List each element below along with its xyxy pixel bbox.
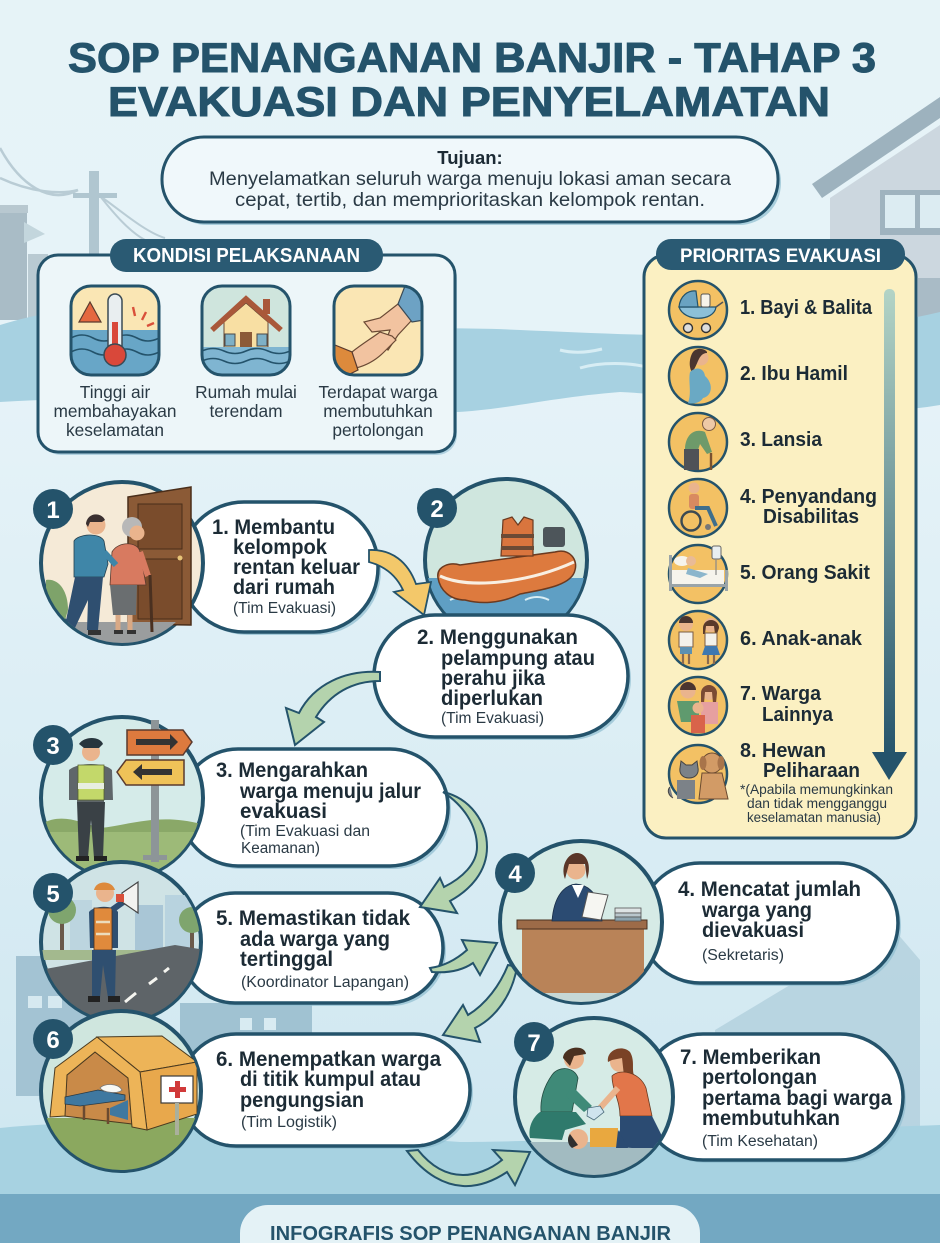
text: warga lainnya: 7. Warga [740, 683, 822, 705]
text: step 2: pelampung atau [441, 646, 595, 670]
text: kondisi 2 [195, 382, 297, 421]
badge: 3 [33, 725, 73, 765]
text: step 3: evakuasi [240, 799, 327, 823]
illustration: step 3 officer and signs [40, 717, 205, 882]
text: hewan peliharaan: Peliharaan [763, 760, 860, 782]
text: step 1: kelompok [233, 535, 327, 559]
title: EVAKUASI DAN PENYELAMATAN [108, 78, 830, 125]
arrow: step 3 to 5 [420, 792, 487, 913]
text: kondisi 1: membahayakan [54, 401, 176, 421]
text: step 5: ada warga yang [240, 927, 390, 951]
callout: tujuan: Menyelamatkan seluruh warga menuju lokasi aman secara [209, 168, 731, 190]
text: step 6: (Tim Logistik) [241, 1114, 337, 1131]
text: warga lainnya [740, 683, 834, 726]
text: warga lainnya: Lainnya [762, 704, 834, 726]
icon: hewan peliharaan [668, 745, 728, 803]
heading: kondisi pelaksanaan: KONDISI PELAKSANAAN [133, 245, 360, 267]
icon: bayi [669, 281, 727, 339]
text: step 2: (Tim Evakuasi) [441, 710, 544, 727]
text: step 7 [680, 1045, 893, 1150]
text: step 7: (Tim Kesehatan) [702, 1133, 818, 1150]
text: orang sakit: 5. Orang Sakit [740, 562, 870, 584]
badge: 7 [514, 1022, 554, 1062]
text: step 6: di titik kumpul atau [240, 1067, 421, 1091]
illustration: step 5 field coordinator [40, 862, 205, 1025]
arrow: step 1 to 2 [369, 550, 431, 615]
text: kondisi 3: Terdapat warga [318, 382, 438, 402]
text: disabilitas: Disabilitas [763, 506, 859, 528]
text: step 1 [212, 515, 361, 617]
step 3 card [180, 749, 451, 869]
text: disabilitas: 4. Penyandang [740, 486, 877, 508]
panel: prioritas evakuasi [644, 239, 916, 838]
footer label [240, 1205, 700, 1243]
text: step 3: 3. Mengarahkan [216, 758, 368, 782]
text: step 1: dari rumah [233, 575, 335, 599]
text: kondisi 2: terendam [209, 401, 283, 421]
badge: 6 [33, 1019, 73, 1059]
arrow: step 5 to 4 [430, 940, 497, 975]
text: kondisi 1: keselamatan [66, 420, 164, 440]
text: step 6: 6. Menempatkan warga [216, 1047, 442, 1071]
pill: step 2 [374, 615, 631, 740]
icon: thermometer in water [71, 286, 159, 375]
heading: prioritas evakuasi [656, 239, 905, 270]
badge: 4: 4 [508, 861, 522, 888]
text: step 4: warga yang [701, 898, 812, 922]
text: step 6 [216, 1047, 442, 1131]
icon: disabilitas [669, 479, 727, 537]
icon: flooded house [202, 286, 290, 375]
arrow: step 4 to 6 [443, 965, 517, 1042]
badge: 2 [417, 488, 457, 528]
text: step 2: diperlukan [441, 686, 543, 710]
text: step 4: 4. Mencatat jumlah [678, 877, 861, 901]
pill: step 4 [640, 863, 901, 986]
text: bayi: 1. Bayi & Balita [740, 297, 873, 319]
pill: step 3 [180, 749, 451, 869]
text: step 5: 5. Memastikan tidak [216, 906, 410, 930]
badge: 1: 1 [46, 497, 60, 524]
text: step 7: membutuhkan [702, 1106, 840, 1130]
text: anak-anak: 6. Anak-anak [740, 628, 863, 650]
icon: anak-anak [669, 611, 727, 669]
text: lansia: 3. Lansia [740, 429, 823, 451]
note: hewan [740, 782, 893, 825]
icon: helping hands [334, 286, 424, 376]
text: step 4 [678, 877, 861, 964]
text: step 6: pengungsian [240, 1088, 364, 1112]
icon: lansia [669, 413, 727, 471]
arrow: priority order [872, 289, 907, 780]
step 1 card [180, 502, 381, 635]
badge: 1 [33, 489, 73, 529]
text: kondisi 3: membutuhkan [323, 401, 433, 421]
step 6 card [180, 1034, 473, 1149]
illustration: step 4 secretary [500, 841, 665, 1010]
callout: tujuan: Tujuan: [437, 147, 503, 168]
illustration: step 7 first aid [510, 1018, 680, 1182]
text: kondisi 3: pertolongan [332, 420, 424, 440]
text: step 5 [216, 906, 410, 991]
icon: warga lainnya [669, 677, 727, 735]
text: step 2: 2. Menggunakan [417, 625, 578, 649]
step 5 card [180, 893, 446, 1006]
text: step 7: 7. Memberikan [680, 1045, 821, 1069]
step 4 card [640, 863, 901, 986]
text: hewan peliharaan [740, 740, 860, 782]
pill: step 6 [180, 1034, 473, 1149]
text: kondisi 1 [54, 382, 176, 440]
text: kondisi 1: Tinggi air [80, 382, 150, 402]
pill: step 5 [180, 893, 446, 1006]
note: hewan: keselamatan manusia) [747, 810, 881, 825]
text: step 1: 1. Membantu [212, 515, 335, 539]
icon: orang sakit [669, 545, 728, 603]
text: kondisi 3 [318, 382, 438, 440]
title [68, 34, 876, 125]
text: kondisi 2: Rumah mulai [195, 382, 297, 402]
text: ibu hamil: 2. Ibu Hamil [740, 363, 848, 385]
title: SOP PENANGANAN BANJIR - TAHAP 3 [68, 34, 876, 81]
text: step 7: pertolongan [702, 1065, 817, 1089]
badge: 3: 3 [46, 733, 60, 760]
text: step 3: warga menuju jalur [239, 779, 422, 803]
callout: tujuan: cepat, tertib, dan memprioritaskan kelompok rentan. [235, 189, 705, 211]
illustration: step 1 helping elder [40, 482, 205, 652]
text: step 4: (Sekretaris) [702, 947, 784, 964]
text: step 3: (Tim Evakuasi dan [240, 823, 370, 840]
heading: prioritas evakuasi: PRIORITAS EVAKUASI [680, 245, 881, 267]
badge: 5: 5 [46, 881, 60, 908]
pill: step 1 [180, 502, 381, 635]
note: hewan: dan tidak mengganggu [747, 796, 887, 811]
text: hewan peliharaan: 8. Hewan [740, 740, 826, 762]
badge: 6: 6 [46, 1027, 60, 1054]
note: hewan: *(Apabila memungkinkan [740, 782, 893, 797]
text: step 1: (Tim Evakuasi) [233, 600, 336, 617]
text: disabilitas [740, 486, 877, 528]
text: step 1: rentan keluar [233, 555, 361, 579]
text: step 5: tertinggal [240, 947, 333, 971]
pill: step 7 [640, 1034, 906, 1163]
step 2 illustration [423, 477, 589, 614]
icon: ibu hamil [669, 347, 727, 405]
text: step 4: dievakuasi [702, 918, 804, 942]
badge: 5 [33, 873, 73, 913]
badge: 7: 7 [527, 1030, 541, 1057]
badge: 4 [495, 853, 535, 893]
step 7 card [640, 1034, 906, 1163]
heading: kondisi pelaksanaan [110, 239, 383, 272]
text: step 2 [417, 625, 595, 727]
panel: kondisi pelaksanaan [38, 239, 457, 455]
arrow: step 6 to 7 [407, 1150, 530, 1186]
illustration: step 6 tent [40, 1011, 205, 1178]
text: step 3 [216, 758, 422, 857]
step 2 card [374, 615, 631, 740]
text: step 7: pertama bagi warga [702, 1086, 893, 1110]
callout: tujuan [162, 137, 781, 225]
text: step 2: perahu jika [441, 666, 546, 690]
badge: 2: 2 [430, 496, 444, 523]
text: step 5: (Koordinator Lapangan) [241, 974, 409, 991]
text: step 3: Keamanan) [241, 840, 320, 857]
arrow: step 2 to 3 [286, 672, 380, 745]
